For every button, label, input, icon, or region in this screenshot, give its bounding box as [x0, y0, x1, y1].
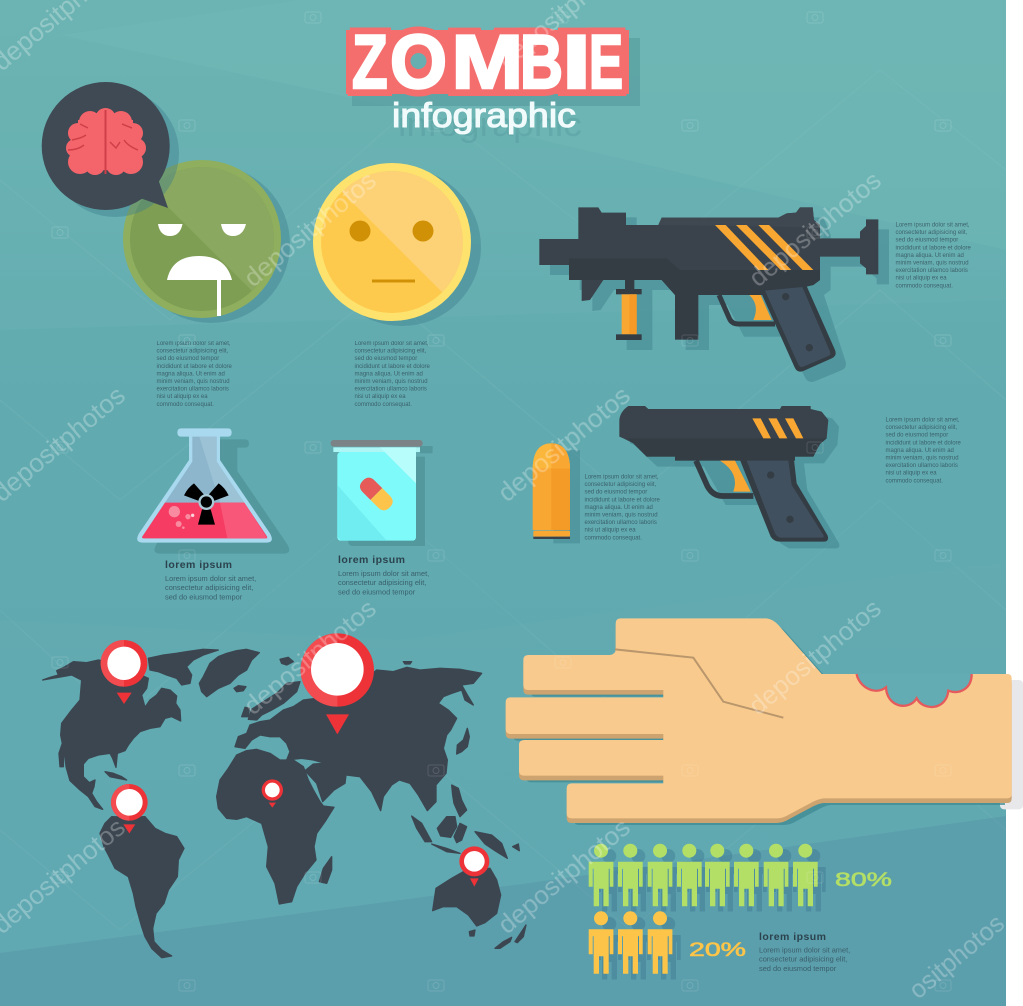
bullet	[533, 443, 580, 543]
watermarks: ositphotos	[903, 908, 1010, 1005]
text block: submachine gun: nisi ut aliquip ex ea	[896, 276, 947, 282]
jar caption text: Lorem ipsum dolor sit amet,	[338, 569, 429, 578]
text block: submachine gun: commodo consequat.	[896, 283, 953, 289]
trigger guard	[696, 461, 753, 496]
flask caption text: consectetur adipisicing elit,	[165, 583, 253, 592]
flask	[137, 428, 289, 554]
title: ZOMBIE: I	[562, 20, 591, 105]
green people shadows	[597, 849, 826, 912]
people caption heading: lorem ipsum	[759, 931, 826, 943]
map: continents	[43, 649, 526, 958]
watermarks: depositphotos	[743, 593, 887, 721]
icon: brain	[66, 108, 146, 175]
jar caption heading: lorem ipsum	[338, 554, 405, 566]
submachine gun	[539, 207, 889, 382]
people caption text: Lorem ipsum dolor sit amet,	[759, 946, 850, 954]
hand with bite	[506, 618, 1023, 825]
text block: pistol: nisi ut aliquip ex ea	[886, 471, 937, 477]
text block: submachine gun: consectetur adipisicing elit,	[896, 230, 968, 236]
zombie mouth and drool	[167, 256, 232, 316]
human face	[313, 163, 481, 326]
green people	[589, 844, 818, 906]
text block: human: commodo consequat.	[354, 402, 412, 408]
text block: zombie: exercitation ullamco laboris	[156, 387, 229, 393]
world map	[43, 633, 526, 958]
text block: pistol: sed do eiusmod tempor	[886, 433, 948, 439]
orange stripes	[715, 225, 813, 270]
title: ZOMBIE: B	[520, 20, 563, 105]
text block: human: exercitation ullamco laboris	[354, 387, 427, 393]
speech bubble with brain	[42, 82, 179, 217]
text block: bullet: commodo consequat.	[584, 535, 642, 541]
subtitle: infographic: infographic	[398, 106, 582, 144]
text block: zombie: Lorem ipsum dolor sit amet,	[156, 341, 231, 347]
pictogram: 80 percent	[589, 844, 892, 912]
title: ZOMBIE: O	[390, 20, 447, 105]
text block: human: sed do eiusmod tempor	[354, 356, 417, 362]
bite mark	[857, 674, 972, 707]
text block: zombie: commodo consequat.	[156, 402, 214, 408]
zombie face	[123, 160, 290, 323]
title: ZOMBIE: E	[589, 20, 623, 105]
zombie eye left	[158, 224, 182, 236]
text block: zombie: minim veniam, quis nostrud	[156, 379, 230, 385]
slide	[619, 406, 828, 457]
people caption	[759, 931, 850, 973]
title: ZOMBIE: Z	[352, 20, 388, 105]
text block: bullet: nisi ut aliquip ex ea	[584, 528, 636, 534]
text block: human: consectetur adipisicing elit,	[354, 349, 427, 355]
text block: submachine gun: Lorem ipsum dolor sit amet,	[896, 222, 970, 228]
pin: Africa	[262, 779, 283, 808]
pin: North America	[101, 640, 147, 704]
text block: pistol: incididunt ut labore et dolore	[886, 440, 962, 446]
flask caption text: sed do eiusmod tempor	[165, 592, 243, 601]
pin: Russia	[301, 633, 374, 734]
flask caption	[165, 559, 256, 601]
title: ZOMBIE: Z	[352, 20, 388, 105]
zombie eye right	[221, 224, 246, 236]
pistol grip	[759, 285, 836, 372]
liquid	[142, 503, 267, 538]
text block: submachine gun: minim veniam, quis nostrud	[896, 260, 969, 266]
text block: submachine gun: incididunt ut labore et dolore	[896, 245, 972, 251]
text block: submachine gun: magna aliqua. Ut enim ad	[896, 253, 964, 259]
text block: bullet: consectetur adipisicing elit,	[584, 482, 657, 488]
watermarks: depositphotos	[492, 812, 636, 940]
text block: pistol: Lorem ipsum dolor sit amet,	[886, 418, 960, 424]
yellow people shadows	[597, 917, 681, 980]
flask caption heading: lorem ipsum	[165, 559, 232, 571]
subtitle: infographic: infographic	[392, 97, 576, 135]
magazine	[675, 293, 698, 340]
watermarks: depositphotos	[238, 593, 382, 721]
text block: human: incididunt ut labore et dolore	[354, 364, 431, 370]
text block: pistol: exercitation ullamco laboris	[886, 463, 958, 469]
label 80%: 80%	[835, 870, 892, 891]
text block: submachine gun: exercitation ullamco laboris	[896, 268, 968, 274]
title: ZOMBIE: M	[452, 20, 523, 105]
label 20%: 20%	[689, 940, 746, 961]
jar with pill	[331, 440, 433, 546]
watermarks: depositphotos	[238, 165, 382, 293]
title: ZOMBIE: I	[562, 20, 591, 105]
text block: bullet: magna aliqua. Ut enim ad	[584, 505, 653, 511]
text block: bullet: incididunt ut labore et dolore	[584, 497, 661, 503]
text block: zombie: magna aliqua. Ut enim ad	[156, 371, 225, 377]
text block: pistol: consectetur adipisicing elit,	[886, 425, 958, 431]
text block: bullet: Lorem ipsum dolor sit amet,	[584, 474, 659, 480]
text block: zombie: consectetur adipisicing elit,	[156, 349, 229, 355]
jar caption text: sed do eiusmod tempor	[338, 587, 416, 596]
text block: pistol: commodo consequat.	[886, 478, 943, 484]
text block: pistol: magna aliqua. Ut enim ad	[886, 448, 954, 454]
text block: zombie: sed do eiusmod tempor	[156, 356, 219, 362]
jar caption	[338, 554, 429, 596]
title: ZOMBIE: E	[589, 20, 623, 105]
pin: South America	[111, 784, 148, 833]
icon: radiation symbol	[184, 483, 229, 525]
people caption text: consectetur adipisicing elit,	[759, 955, 847, 964]
text block: zombie: nisi ut aliquip ex ea	[156, 394, 208, 400]
flask caption text: Lorem ipsum dolor sit amet,	[165, 574, 256, 583]
text block: human: magna aliqua. Ut enim ad	[354, 371, 423, 377]
watermarks: depositphotos	[492, 380, 636, 508]
pictogram: 20 percent	[589, 911, 746, 980]
pistol grip	[740, 460, 828, 542]
text block: pistol: minim veniam, quis nostrud	[886, 456, 959, 462]
title: ZOMBIE: O	[390, 20, 447, 105]
icon: pill	[357, 475, 396, 513]
barrel and body	[539, 207, 878, 301]
text block: human: minim veniam, quis nostrud	[354, 379, 428, 385]
text block: human: nisi ut aliquip ex ea	[354, 394, 406, 400]
text block: zombie: incididunt ut labore et dolore	[156, 364, 233, 370]
title: ZOMBIE: B	[520, 20, 563, 105]
trigger guard	[719, 295, 775, 324]
text block: bullet: exercitation ullamco laboris	[584, 520, 657, 526]
human eye left	[350, 220, 370, 242]
human mouth	[372, 280, 415, 282]
jar caption text: consectetur adipisicing elit,	[338, 578, 426, 587]
thumb crease	[615, 649, 783, 718]
text block: bullet: minim veniam, quis nostrud	[584, 512, 658, 518]
text block: submachine gun: sed do eiusmod tempor	[896, 238, 958, 244]
pin: Australia	[459, 846, 489, 887]
human eye right	[412, 220, 434, 242]
text block: human: Lorem ipsum dolor sit amet,	[354, 341, 429, 347]
people caption text: sed do eiusmod tempor	[759, 964, 837, 973]
fore grip	[616, 279, 642, 340]
orange stripes	[752, 418, 803, 438]
yellow people	[589, 911, 672, 974]
pistol	[619, 406, 839, 548]
title: ZOMBIE	[346, 20, 640, 106]
text block: bullet: sed do eiusmod tempor	[584, 490, 647, 496]
title: ZOMBIE: M	[452, 20, 523, 105]
watermarks: depositphotos	[743, 165, 887, 293]
